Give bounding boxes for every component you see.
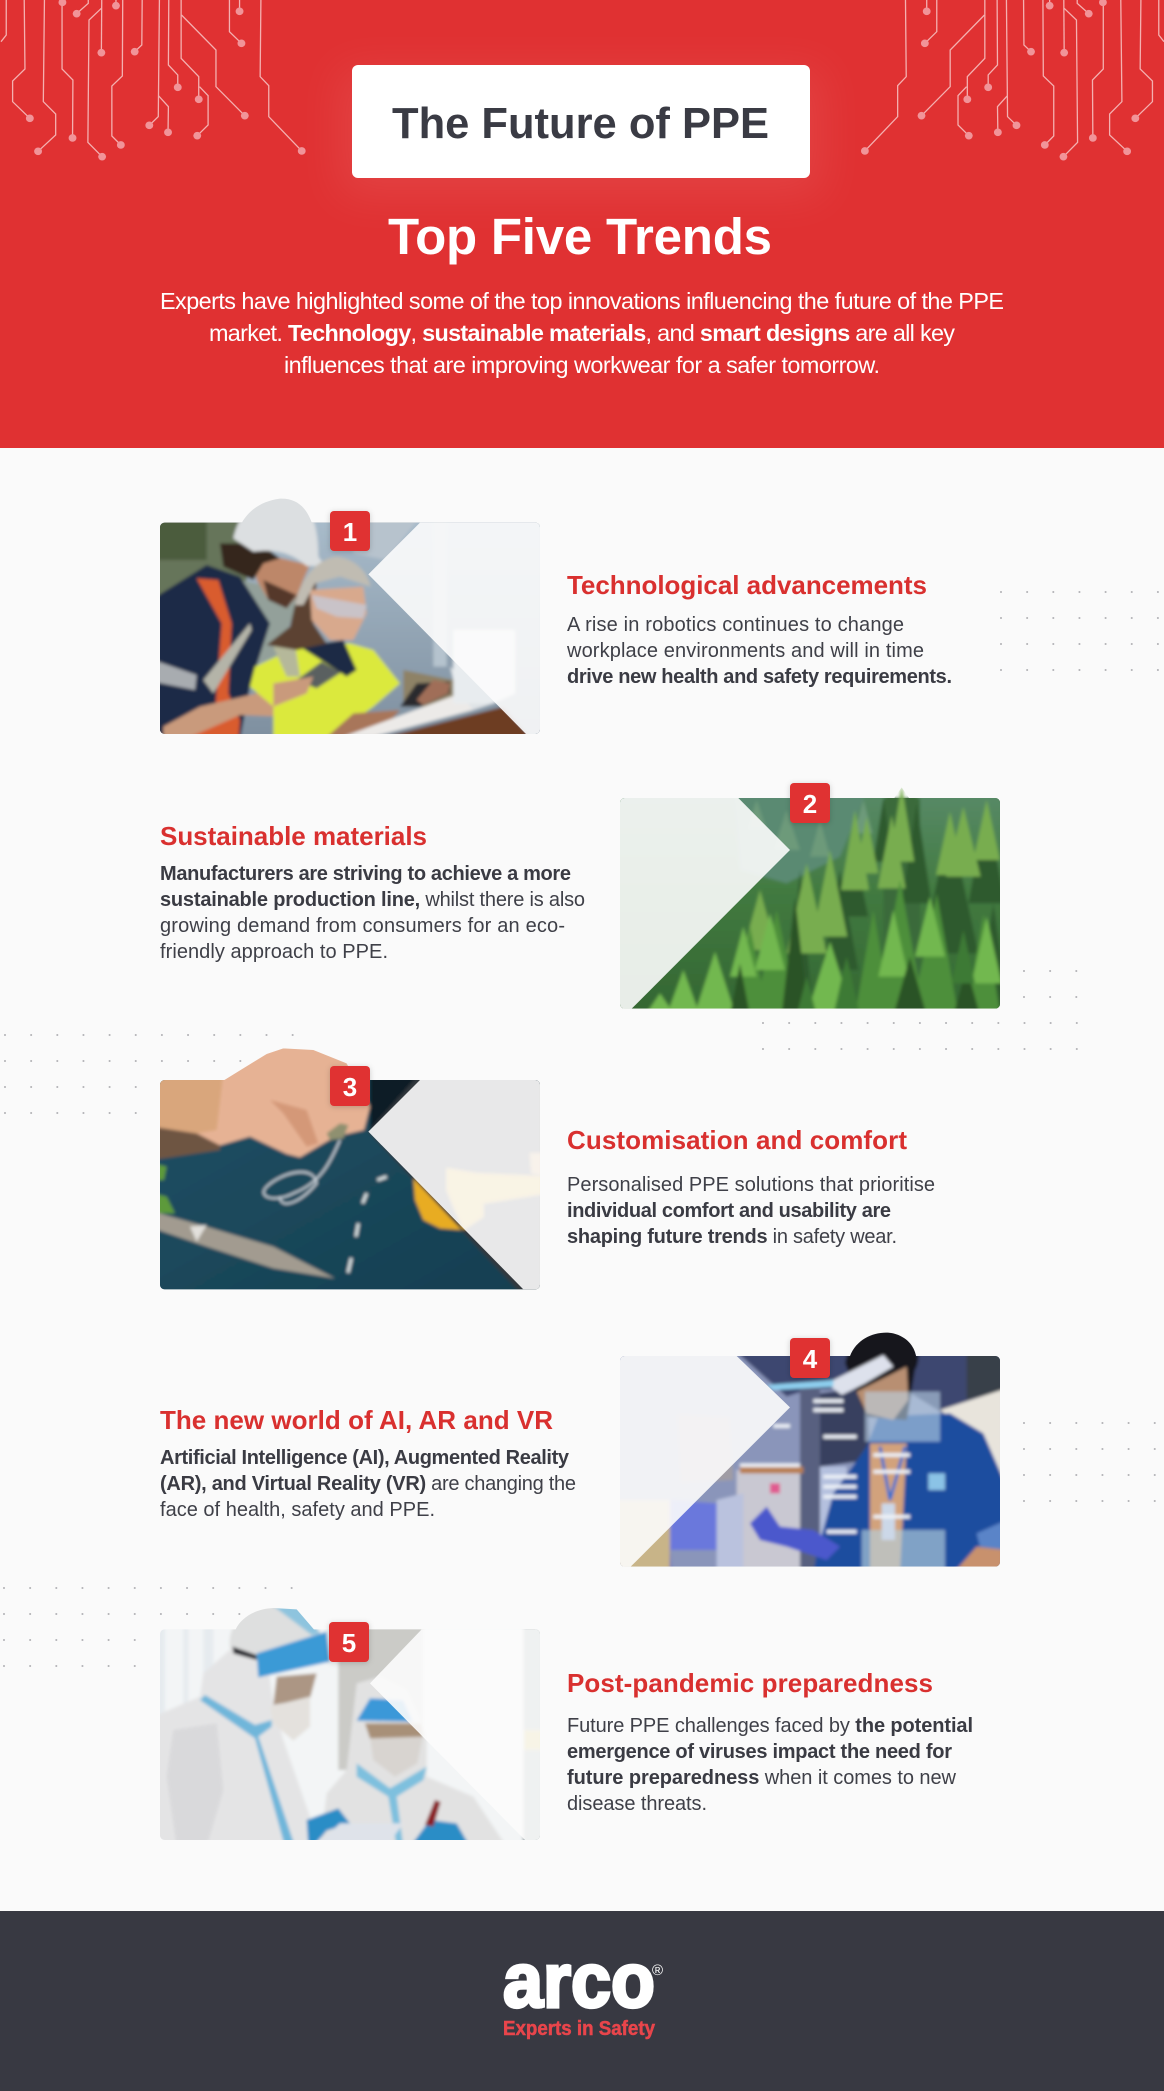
text block 3: Customisation and comfort bbox=[567, 1125, 907, 1155]
text block 4 bbox=[160, 1405, 576, 1521]
text block 1: workplace environments and will in time bbox=[566, 640, 924, 662]
logo: arco: arco bbox=[503, 1938, 655, 2024]
text block 2: Manufacturers are striving to achieve a more bbox=[160, 863, 571, 885]
title box: The Future of PPE bbox=[392, 100, 769, 148]
intro paragraph: market. Technology, sustainable materials, and smart designs are all key bbox=[209, 320, 955, 346]
panel: footer bbox=[0, 1911, 1164, 2091]
text block 2 bbox=[160, 821, 585, 963]
panel: header bbox=[0, 0, 1164, 448]
text block 5 bbox=[567, 1668, 973, 1815]
text block 2: growing demand from consumers for an eco- bbox=[160, 915, 565, 937]
text block 1: Technological advancements bbox=[567, 570, 927, 600]
badge 5 bbox=[329, 1622, 369, 1662]
badge 2 bbox=[790, 783, 830, 823]
text block 4: (AR), and Virtual Reality (VR) are changing the bbox=[160, 1473, 576, 1495]
photo 2: forest bbox=[613, 785, 1010, 1017]
text block 1: A rise in robotics continues to change bbox=[567, 614, 904, 636]
photo 1: engineers bbox=[153, 495, 547, 740]
text block 1: drive new health and safety requirements. bbox=[567, 666, 952, 688]
text block 4: The new world of AI, AR and VR bbox=[160, 1405, 553, 1435]
text block 5: disease threats. bbox=[567, 1793, 707, 1815]
badge 1: 1 bbox=[343, 517, 357, 547]
badge 4 bbox=[790, 1338, 830, 1378]
badge 4: 4 bbox=[803, 1344, 818, 1374]
dot grids bbox=[4, 592, 1160, 1666]
text block 2: sustainable production line, whilst there is also bbox=[160, 889, 585, 911]
circuit pattern left bbox=[1, 0, 306, 160]
text block 2: friendly approach to PPE. bbox=[160, 941, 388, 963]
text block 1 bbox=[566, 570, 952, 688]
text block 5: future preparedness when it comes to new bbox=[567, 1767, 957, 1789]
text block 3 bbox=[567, 1125, 935, 1248]
badge 2: 2 bbox=[803, 789, 817, 819]
photo 5: protective suits bbox=[153, 1604, 547, 1847]
badge 3 bbox=[330, 1066, 370, 1106]
intro paragraph: influences that are improving workwear for a safer tomorrow. bbox=[284, 352, 880, 378]
logo: arco: Experts in Safety bbox=[503, 2018, 656, 2040]
text block 3: individual comfort and usability are bbox=[567, 1200, 891, 1222]
intro paragraph bbox=[160, 288, 1004, 378]
badge 3: 3 bbox=[343, 1072, 357, 1102]
logo: arco: ® bbox=[652, 1962, 663, 1979]
text block 5: emergence of viruses impact the need for bbox=[567, 1741, 952, 1763]
text block 2: Sustainable materials bbox=[160, 821, 427, 851]
subtitle: Top Five Trends bbox=[388, 208, 772, 265]
text block 4: Artificial Intelligence (AI), Augmented Reality bbox=[160, 1447, 570, 1469]
title box bbox=[352, 65, 810, 178]
text block 5: Post-pandemic preparedness bbox=[567, 1668, 933, 1698]
text block 4: face of health, safety and PPE. bbox=[160, 1499, 435, 1521]
photo 3: stitching bbox=[153, 1045, 547, 1296]
text block 5: Future PPE challenges faced by the potential bbox=[567, 1715, 973, 1737]
text block 3: shaping future trends in safety wear. bbox=[567, 1226, 897, 1248]
circuit pattern right bbox=[861, 0, 1164, 160]
intro paragraph: Experts have highlighted some of the top innovations influencing the future of the PPE bbox=[160, 288, 1004, 314]
photo 4: VR headset bbox=[613, 1329, 1007, 1573]
badge 5: 5 bbox=[342, 1628, 356, 1658]
text block 3: Personalised PPE solutions that prioritise bbox=[567, 1174, 935, 1196]
badge 1 bbox=[330, 511, 370, 551]
